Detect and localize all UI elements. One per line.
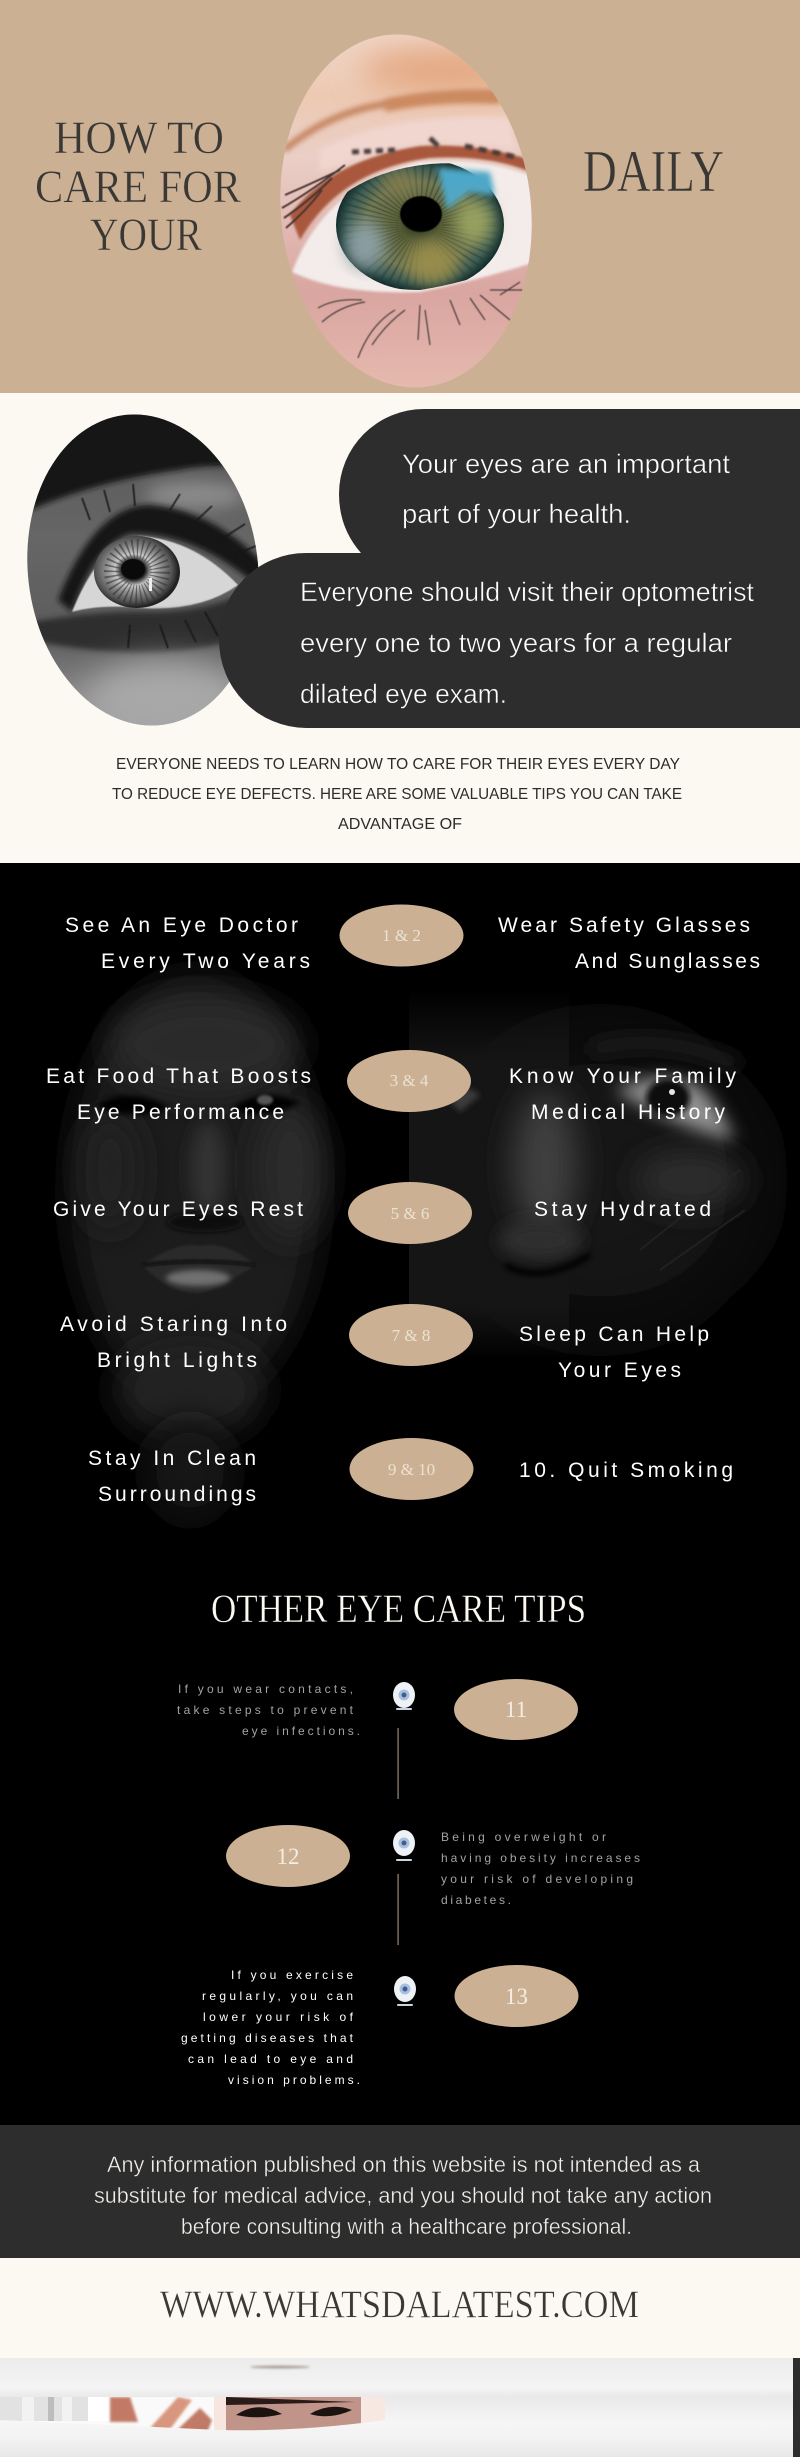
- panel: introduction: [0, 393, 800, 863]
- badge 12: [226, 1825, 350, 1887]
- badge 1 and 2: [340, 904, 464, 966]
- text block: your eyes: part of your health.: [402, 499, 631, 529]
- tip 12 text: your risk of developing: [441, 1872, 633, 1886]
- badge 11: [454, 1679, 578, 1740]
- icon: eye 11: [393, 1682, 415, 1710]
- image: left face: [70, 975, 325, 1520]
- text block: your eyes: Your eyes are an important: [402, 449, 730, 479]
- text block: your eyes: [402, 449, 730, 529]
- badge 5 and 6: [348, 1182, 472, 1244]
- tip 8 right label: [519, 1323, 709, 1382]
- callout: dark speech shape: [219, 409, 800, 728]
- tip row 4: [60, 1304, 709, 1382]
- tips 1 left label: [65, 914, 310, 973]
- lower lash band: [30, 595, 240, 652]
- image: black and white eye in oval: [27, 414, 258, 726]
- tip 12 text: having obesity increases: [441, 1851, 640, 1865]
- badge 3 and 4: 3 & 4: [390, 1071, 429, 1090]
- disclaimer text: Any information published on this website is not intended as a: [107, 2152, 701, 2177]
- tip 13 text: can lead to eye and: [188, 2052, 353, 2066]
- title: how to care for your: YOUR: [90, 209, 203, 261]
- panel: header: [0, 0, 800, 400]
- hair: [32, 414, 226, 513]
- tip 9 left label: [88, 1447, 256, 1506]
- tip 6 right label: Stay Hydrated: [534, 1198, 711, 1221]
- badge 9 and 10: 9 & 10: [388, 1460, 435, 1479]
- badge 12: 12: [276, 1844, 300, 1869]
- tip 11 text: If you wear contacts,: [178, 1682, 353, 1696]
- badge 13: 13: [505, 1984, 528, 2009]
- tip 10 right label: 10. Quit Smoking: [519, 1459, 733, 1482]
- lower lashes: [318, 282, 525, 358]
- text block: everyone should visit: [300, 577, 754, 709]
- tip 8 right label: Your Eyes: [558, 1359, 681, 1382]
- title: how to care for your: HOW TO: [54, 112, 224, 164]
- tip row 5: [88, 1438, 733, 1506]
- tip 13 text: lower your risk of: [203, 2010, 354, 2024]
- tip 13 text: regularly, you can: [202, 1989, 353, 2003]
- badge 11: 11: [505, 1697, 527, 1722]
- tip 12 text: diabetes.: [441, 1893, 511, 1907]
- tip 5 left label: Give Your Eyes Rest: [53, 1198, 303, 1221]
- tip row 2: [46, 1050, 736, 1124]
- iris: [336, 159, 504, 291]
- eyelid crease: [284, 96, 500, 150]
- tips 2 right label: And Sunglasses: [575, 950, 760, 973]
- badge 1 and 2: 1 & 2: [382, 926, 421, 945]
- disclaimer text: substitute for medical advice, and you should not take any action: [94, 2183, 712, 2208]
- text block: everyone should visit: dilated eye exam.: [300, 679, 507, 709]
- tips 4 right label: Medical History: [531, 1101, 726, 1124]
- image: right face: [409, 990, 760, 1360]
- connector line: 11 to 12: [397, 1728, 399, 1799]
- tips 3 left label: Eat Food That Boosts: [46, 1065, 311, 1088]
- lashes: [82, 484, 258, 648]
- tip 12 text: [441, 1830, 640, 1907]
- badge 7 and 8: 7 & 8: [392, 1326, 430, 1345]
- tip 13 text: vision problems.: [228, 2073, 360, 2087]
- badge 7 and 8: [349, 1304, 473, 1366]
- connector line: 12 to 13: [397, 1874, 399, 1945]
- badge 13: [454, 1965, 578, 2027]
- tip 7 left label: Avoid Staring Into: [60, 1313, 287, 1336]
- tips 4 right label: [509, 1065, 736, 1124]
- text block: everyone should visit: every one to two years for a regular: [300, 628, 732, 658]
- tips 1 left label: See An Eye Doctor: [65, 914, 298, 937]
- iris: [94, 536, 180, 608]
- text block: everyone should visit: Everyone should visit their optometrist: [300, 577, 754, 607]
- icon: eye 12: [393, 1830, 415, 1861]
- text block: learn how to care: TO REDUCE EYE DEFECTS. HERE ARE SOME VALUABLE TIPS YOU CAN TAKE: [112, 786, 682, 803]
- website url: WWW.WHATSDALATEST.COM: [160, 2283, 639, 2326]
- heading: daily: DAILY: [583, 138, 724, 204]
- panel: website: [0, 2258, 800, 2358]
- title: how to care for your: [35, 112, 242, 261]
- tips 2 right label: [498, 914, 760, 973]
- heading: other eye care tips: OTHER EYE CARE TIPS: [211, 1586, 586, 1631]
- disclaimer text: [94, 2152, 712, 2239]
- tips 3 left label: Eye Performance: [77, 1101, 284, 1124]
- panel: disclaimer: [0, 2125, 800, 2258]
- tip 11 text: [177, 1682, 360, 1738]
- lash band: [58, 505, 268, 612]
- tip 9 left label: Stay In Clean: [88, 1447, 256, 1470]
- text block: learn how to care: [112, 756, 682, 833]
- upper lashes: [282, 165, 345, 228]
- tip 8 right label: Sleep Can Help: [519, 1323, 709, 1346]
- panel: top ten tips: [48, 904, 782, 2086]
- tip 7 left label: Bright Lights: [97, 1349, 257, 1372]
- tips 1 left label: Every Two Years: [101, 950, 310, 973]
- badge 3 and 4: [347, 1050, 471, 1112]
- tips 4 right label: Know Your Family: [509, 1065, 736, 1088]
- tip row 3: [53, 1182, 711, 1244]
- text block: learn how to care: EVERYONE NEEDS TO LEARN HOW TO CARE FOR THEIR EYES EVERY DAY: [116, 756, 680, 773]
- tips 2 right label: Wear Safety Glasses: [498, 914, 750, 937]
- sclera: [72, 536, 238, 612]
- badge 9 and 10: [350, 1438, 474, 1500]
- tips 3 left label: [46, 1065, 311, 1124]
- icon: eye 13: [394, 1976, 416, 2006]
- tip 9 left label: Surroundings: [98, 1483, 256, 1506]
- image: person peeking through blinds: [0, 2358, 800, 2457]
- tip 11 text: take steps to prevent: [177, 1703, 354, 1717]
- text block: learn how to care: ADVANTAGE OF: [338, 816, 462, 833]
- badge 5 and 6: 5 & 6: [391, 1204, 429, 1223]
- tip 13 text: [181, 1968, 360, 2087]
- image: colour eye in oval: [280, 34, 532, 388]
- tip 11 text: eye infections.: [242, 1724, 360, 1738]
- tip 12 text: Being overweight or: [441, 1830, 606, 1844]
- sclera: [292, 161, 535, 292]
- title: how to care for your: CARE FOR: [35, 161, 242, 213]
- tip row 1: [65, 904, 760, 973]
- tip 13 text: getting diseases that: [181, 2031, 354, 2045]
- disclaimer text: before consulting with a healthcare professional.: [181, 2214, 632, 2239]
- tip 13 text: If you exercise: [231, 1968, 353, 1982]
- tip 7 left label: [60, 1313, 287, 1372]
